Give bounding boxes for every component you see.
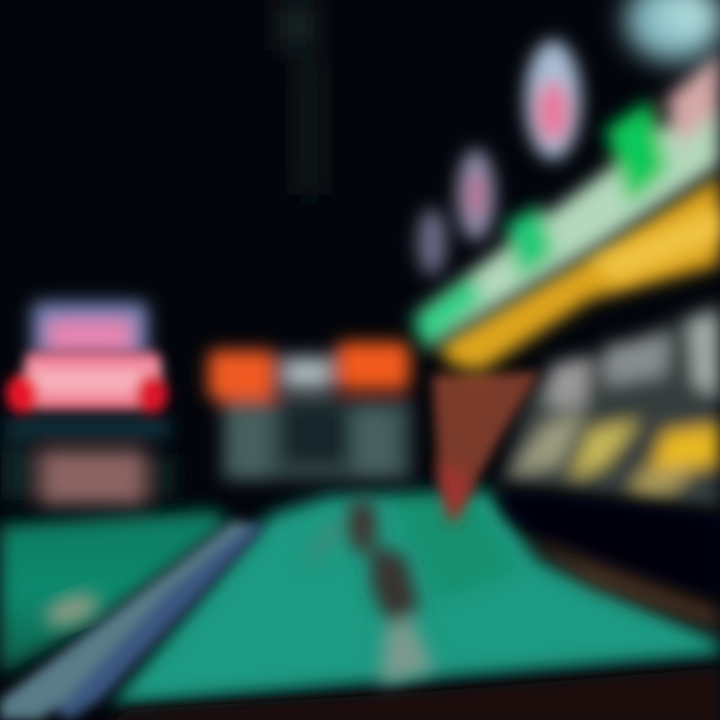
faint pole in the sky bbox=[280, 0, 320, 195]
white centre bbox=[282, 356, 332, 390]
right black counter bbox=[495, 490, 720, 600]
orange right lamp bbox=[336, 342, 410, 390]
foreground dark edge bbox=[100, 668, 720, 720]
floor lane stripe bbox=[0, 520, 262, 720]
red-brown banner bbox=[432, 372, 540, 525]
door sides bbox=[2, 445, 34, 500]
right store lower shelves bbox=[500, 300, 720, 510]
green floor bbox=[0, 490, 720, 705]
balloon 3 bbox=[417, 208, 447, 276]
sign base band bbox=[5, 418, 170, 438]
yellow awning bbox=[438, 175, 720, 372]
balloon signs bbox=[417, 40, 581, 276]
grey facade bbox=[222, 400, 412, 480]
figure bbox=[305, 497, 435, 685]
balloon 2 bbox=[457, 149, 495, 241]
middle building bbox=[208, 342, 412, 480]
floor patch bbox=[41, 587, 103, 633]
sign top bbox=[32, 302, 148, 358]
lower door bbox=[40, 450, 145, 505]
red ends bbox=[6, 374, 38, 414]
sign body bbox=[24, 352, 162, 410]
balloon 4 top right bbox=[625, 0, 720, 62]
banner tip bbox=[438, 460, 470, 525]
awning shine bbox=[590, 205, 720, 282]
balloon 1 bbox=[525, 40, 581, 160]
orange left lamp bbox=[208, 350, 276, 400]
left building: pink sign bbox=[2, 302, 175, 505]
brown floor strip bbox=[520, 535, 720, 630]
green and white strip bbox=[412, 50, 720, 350]
